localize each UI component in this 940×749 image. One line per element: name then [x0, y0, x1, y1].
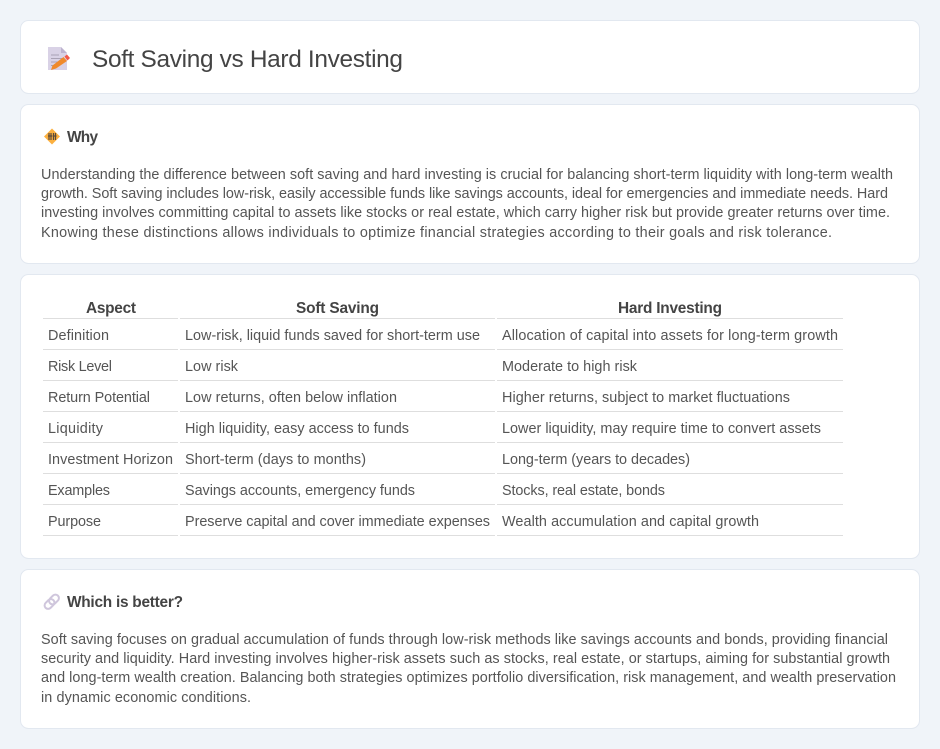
heading: which is better: Which is better?: [67, 594, 183, 611]
row: return potential: [48, 390, 790, 406]
row: examples: Examples: [48, 483, 110, 499]
icon: document with pencil: [48, 47, 70, 70]
panel: which is better: [20, 570, 920, 728]
panel: comparison table: [20, 274, 920, 558]
table header row: [86, 300, 722, 317]
which is better paragraph: security and liquidity. Hard investing involves higher-risk assets such as stocks, real estate, or startups, aiming for substantial growth: [41, 651, 890, 667]
row: return potential: Low returns, often below inflation: [185, 390, 397, 406]
row: investment horizon: Investment Horizon: [48, 452, 173, 468]
which is better paragraph: Soft saving focuses on gradual accumulation of funds through low-risk methods like savings accounts and bonds, providing financial: [41, 632, 888, 648]
table grid lines: [43, 318, 843, 536]
row: return potential: Higher returns, subject to market fluctuations: [502, 390, 790, 406]
row: purpose: Wealth accumulation and capital growth: [502, 514, 759, 530]
which is better paragraph: [41, 632, 896, 706]
row: definition: [48, 328, 838, 344]
row: investment horizon: [48, 452, 690, 468]
row: examples: Stocks, real estate, bonds: [502, 483, 665, 499]
which is better paragraph: in dynamic economic conditions.: [41, 690, 251, 706]
row: investment horizon: Long-term (years to decades): [502, 452, 690, 468]
row: risk level: Risk Level: [48, 359, 112, 375]
row: purpose: [48, 514, 759, 530]
row: examples: Savings accounts, emergency funds: [185, 483, 415, 499]
table header row: Hard Investing: [618, 300, 722, 317]
why paragraph: Understanding the difference between soft saving and hard investing is crucial for balancing short-term liquidity with long-term wealth: [41, 167, 893, 183]
row: purpose: Purpose: [48, 514, 101, 530]
icon: chain link: [43, 593, 60, 610]
row: return potential: Return Potential: [48, 390, 150, 406]
header panel: [20, 20, 920, 94]
row: definition: Definition: [48, 328, 109, 344]
why paragraph: Knowing these distinctions allows individuals to optimize financial strategies according to their goals and risk tolerance.: [41, 225, 832, 241]
panel: why: [20, 104, 920, 264]
row: risk level: Low risk: [185, 359, 239, 375]
which is better paragraph: and long-term wealth creation. Balancing both strategies optimizes portfolio diversification, risk management, and wealth preservation: [41, 670, 896, 686]
row: liquidity: Lower liquidity, may require time to convert assets: [502, 421, 821, 437]
why paragraph: [41, 167, 893, 241]
row: liquidity: Liquidity: [48, 421, 104, 437]
row: investment horizon: Short-term (days to months): [185, 452, 366, 468]
why paragraph: investing involves committing capital to assets like stocks or real estate, which carry higher risk but provide greater returns over time.: [41, 205, 890, 221]
row: liquidity: [48, 421, 821, 437]
title: Soft Saving vs Hard Investing: [92, 46, 403, 73]
row: definition: Allocation of capital into assets for long-term growth: [502, 328, 838, 344]
heading: why: Why: [67, 129, 98, 146]
table header row: Aspect: [86, 300, 136, 317]
why paragraph: growth. Soft saving includes low-risk, easily accessible funds like savings accounts, ideal for emergencies and immediate needs. Hard: [41, 186, 888, 202]
row: purpose: Preserve capital and cover immediate expenses: [185, 514, 490, 530]
table header row: Soft Saving: [296, 300, 379, 317]
row: definition: Low-risk, liquid funds saved for short-term use: [185, 328, 480, 344]
row: liquidity: High liquidity, easy access to funds: [185, 421, 409, 437]
row: risk level: Moderate to high risk: [502, 359, 638, 375]
row: examples: [48, 483, 665, 499]
icon: warning diamond: [44, 128, 60, 144]
row: risk level: [48, 359, 638, 375]
